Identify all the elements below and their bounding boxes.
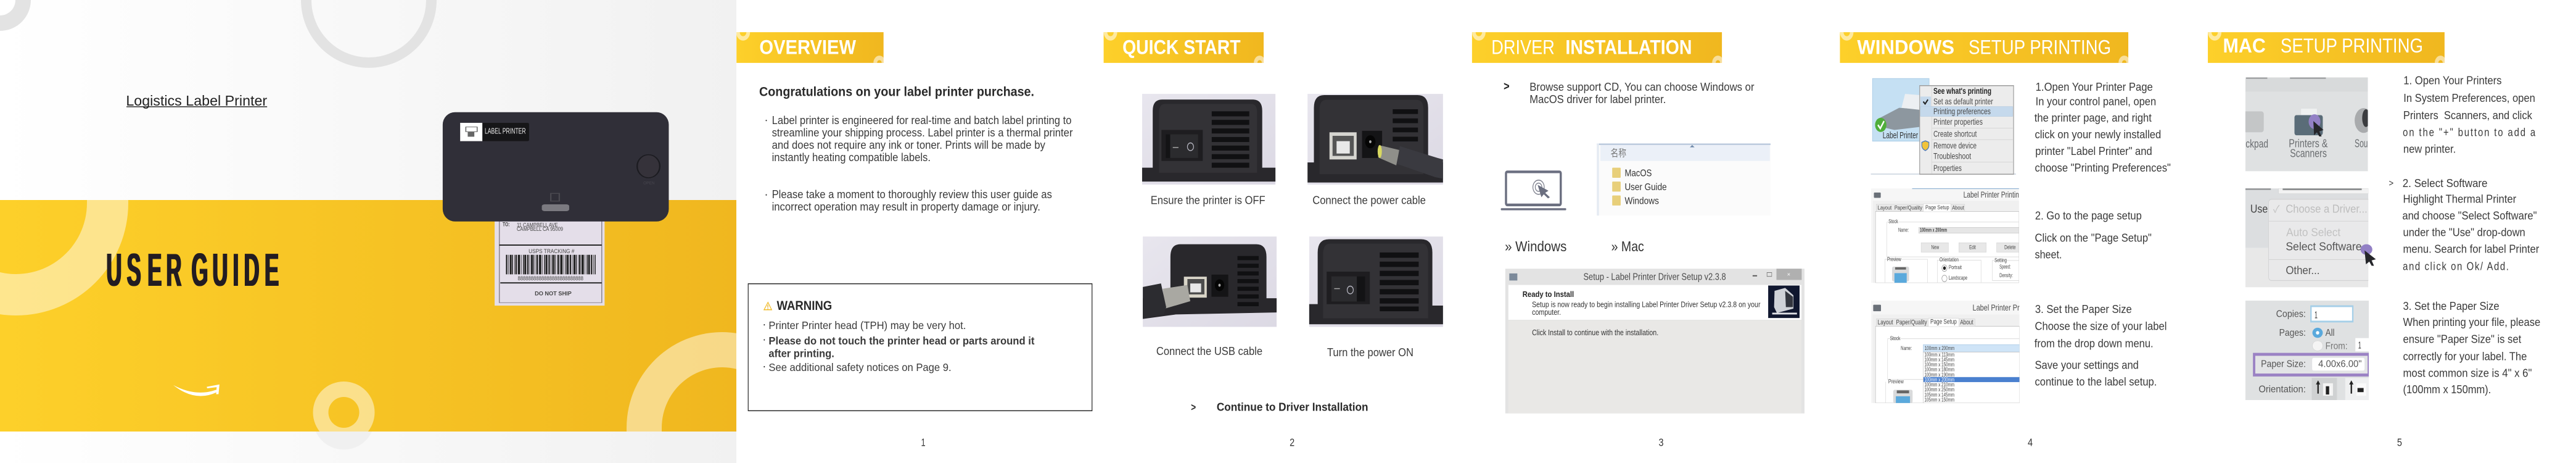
- caption: ensure off: Ensure the printer is OFF: [1151, 194, 1265, 207]
- mac setup header: SETUP PRINTING: [2281, 36, 2423, 57]
- screenshot: paper size dropdown: About: [1960, 319, 1973, 327]
- screenshot: page setup tab: [1871, 188, 2019, 286]
- screenshot: print dialog paper size: Pages:: [2279, 328, 2306, 338]
- folder icons: [1612, 168, 1621, 206]
- step 3 text: 3. Set the Paper Size: [2403, 300, 2500, 313]
- browse instruction: >: [1504, 79, 1510, 93]
- intro bullet 1: Label printer is engineered for real-time and batch label printing to: [772, 114, 1072, 127]
- screenshot: print dialog paper size: Orientation:: [2258, 384, 2306, 395]
- screenshot: paper size dropdown: 100mm x 210mm: [1924, 381, 1954, 388]
- warning box: Printer Printer head (TPH) may be very hot.: [768, 320, 966, 332]
- shipping label: CAMPBELL CA 95009: [517, 225, 563, 232]
- page number: 1: [921, 436, 926, 449]
- paper size highlight: 4.00x6.00": [2318, 359, 2362, 370]
- printer body: [443, 112, 669, 222]
- screenshot: page setup tab: Page Setup: [1925, 204, 1949, 211]
- cover page: [0, 0, 736, 463]
- folder listing: [1597, 143, 1771, 215]
- photo: usb cable: [1143, 236, 1277, 327]
- step 3 text: Choose the size of your label: [2035, 320, 2167, 333]
- step 2 text: 2. Select Software: [2403, 177, 2488, 190]
- screenshot: page setup tab: Name:: [1898, 227, 1909, 233]
- quick start header: QUICK START: [1122, 37, 1241, 59]
- screenshot: select software menu: ✓: [2273, 204, 2280, 215]
- step 3 text: from the drop down menu.: [2035, 337, 2154, 350]
- windows setup header: [1840, 32, 2129, 63]
- screenshot: print dialog paper size: Copies:: [2276, 309, 2306, 320]
- screenshot: page setup tab: Edit: [1969, 244, 1976, 251]
- step 3 text: ensure "Paper Size" is set: [2403, 333, 2522, 346]
- screenshot: print dialog paper size: 1: [2358, 340, 2361, 351]
- continue link: >: [1191, 402, 1196, 414]
- shipping label: TO:: [503, 220, 510, 228]
- user guide title: USER GUIDE: [106, 244, 279, 296]
- window controls: ×: [1787, 271, 1790, 278]
- context menu: [1920, 86, 2014, 174]
- driver installation header: [1471, 32, 1722, 63]
- screenshot: printers and scanners: [2239, 77, 2372, 171]
- context menu: Printing preferences: [1933, 107, 1991, 116]
- page number: 3: [1659, 436, 1664, 449]
- context menu: Properties: [1933, 164, 1962, 173]
- screenshot: paper size dropdown: Stock: [1890, 335, 1901, 341]
- caption: power cable: Connect the power cable: [1312, 194, 1426, 207]
- decorative grey rings: [0, 0, 437, 449]
- screenshot: select software menu: Select Software: [2286, 241, 2362, 253]
- overview header: OVERVIEW: [759, 36, 856, 59]
- screenshot: paper size dropdown: [1871, 301, 2020, 403]
- intro bullet 2: Please take a moment to thoroughly review this user guide as: [772, 188, 1052, 201]
- folder listing: Windows: [1624, 195, 1659, 206]
- step 1 text: on the "+" button to add a: [2403, 126, 2536, 139]
- screenshot: paper size dropdown: 100mm x 145mm: [1924, 356, 1954, 363]
- step 1 text: 1.Open Your Printer Page: [2036, 80, 2153, 93]
- step 2 text: and click on Ok/ Add.: [2403, 260, 2509, 273]
- step 2 text: sheet.: [2035, 248, 2062, 261]
- setup window: Click Install to continue with the installation.: [1532, 328, 1658, 337]
- shipping label: [495, 220, 604, 306]
- setup window: Setup - Label Printer Driver Setup v2.3.8: [1583, 271, 1726, 282]
- screenshot: select software menu: Auto Select: [2286, 227, 2341, 239]
- screenshot: page setup tab: Label Printer Printin: [1964, 190, 2019, 199]
- screenshot: page setup tab: 100mm x 200mm: [1920, 227, 1947, 233]
- context menu: Create shortcut: [1933, 129, 1977, 139]
- intro bullet 1: instantly heating compatible labels.: [772, 151, 931, 164]
- step 2 text: Highlight Thermal Printer: [2403, 193, 2517, 206]
- step 1 text: [2403, 74, 2536, 156]
- step 1 text: choose "Printing Preferences": [2035, 161, 2171, 174]
- folder listing: User Guide: [1624, 181, 1667, 192]
- quick start header: [1104, 32, 1264, 63]
- warning box: after printing.: [768, 348, 834, 360]
- window controls: [1509, 269, 1801, 280]
- step 3 text: correctly for your label. The: [2403, 350, 2527, 363]
- intro bullet 2: incorrect operation may result in property damage or injury.: [772, 201, 1040, 213]
- screenshot: paper size dropdown: 100mm x 250mm: [1924, 386, 1954, 393]
- page number: 4: [2028, 436, 2033, 449]
- warning box: See additional safety notices on Page 9.: [768, 362, 952, 373]
- paper size highlight: Paper Size:: [2261, 359, 2306, 370]
- step 1 text: new printer.: [2403, 143, 2456, 156]
- screenshot: paper size dropdown: 100mm x 180mm: [1924, 366, 1954, 373]
- context menu: Troubleshoot: [1933, 151, 1972, 161]
- shipping label: 8888888888888888888888888: [518, 275, 583, 282]
- screenshot: page setup tab: Layout: [1878, 204, 1892, 211]
- intro bullet 1: [765, 114, 1073, 164]
- screenshot: paper size dropdown: Page Setup: [1930, 319, 1957, 326]
- screenshot: paper size dropdown: 100mm x 200mm: [1925, 344, 1954, 351]
- step 1 text: the printer page, and right: [2035, 112, 2152, 124]
- screenshot: paper size dropdown: 100mm x 200mm: [1924, 376, 1954, 383]
- step 1 text: In System Preferences, open: [2403, 91, 2535, 104]
- intro bullet 2: [765, 188, 1052, 213]
- shipping label: DO NOT SHIP: [535, 290, 572, 297]
- step 2 text: 2. Go to the page setup: [2035, 209, 2142, 222]
- screenshot: printer context menu: [1871, 78, 2016, 175]
- cover background: [0, 0, 736, 463]
- driver installation header: DRIVER: [1491, 37, 1555, 59]
- icon: laptop with cursor: [1501, 172, 1566, 211]
- step 3 text: Save your settings and: [2035, 359, 2139, 372]
- screenshot: print dialog paper size: 1: [2315, 310, 2318, 321]
- step 2 text: under the "Use" drop-down: [2403, 226, 2525, 239]
- step 3 text: (100mm x 150mm).: [2403, 383, 2491, 396]
- page number: 5: [2397, 436, 2402, 449]
- screenshot: page setup tab: About: [1952, 204, 1964, 211]
- screenshot: select software menu: Choose a Driver...: [2286, 203, 2368, 215]
- screenshot: paper size dropdown: Label Printer Pr: [1972, 303, 2020, 313]
- screenshot: printer context menu: Label Printer: [1883, 130, 1919, 140]
- screenshot: select software menu: Use: [2250, 203, 2268, 215]
- icon: cursor: [2361, 244, 2376, 265]
- screenshot: print dialog paper size: From:: [2326, 341, 2348, 352]
- decorative pale rings on yellow: [0, 200, 736, 443]
- screenshot: print dialog paper size: All: [2326, 328, 2335, 338]
- photo: power cable: [1307, 94, 1443, 185]
- screenshot: paper size dropdown: 100mm x 113mm: [1924, 351, 1954, 358]
- step 1 text: 1. Open Your Printers: [2403, 74, 2501, 87]
- mac setup header: [2208, 32, 2445, 63]
- mac setup header: MAC: [2223, 36, 2266, 57]
- page 4: windows setup printing: [1840, 26, 2171, 449]
- screenshot: printers and scanners: Sou: [2355, 138, 2368, 150]
- screenshot: page setup tab: Paper/Quality: [1895, 204, 1923, 211]
- step 3 text: continue to the label setup.: [2035, 375, 2157, 388]
- screenshot: paper size dropdown: 105mm x 150mm: [1924, 396, 1954, 403]
- step 2 text: menu. Search for label Printer: [2403, 243, 2540, 256]
- context menu: See what's printing: [1933, 86, 1991, 96]
- screenshot: page setup tab: Delete: [2004, 244, 2016, 251]
- setup window: Setup is now ready to begin installing Label Printer Driver Setup v2.3.8 on your: [1532, 300, 1761, 309]
- step 3 text: When printing your file, please: [2403, 316, 2540, 328]
- context menu: Set as default printer: [1933, 97, 1993, 106]
- setup icon: [1768, 286, 1800, 318]
- icon: printer with cursor: [2294, 109, 2324, 136]
- driver installation header: INSTALLATION: [1565, 37, 1692, 59]
- step 3 text: 3. Set the Paper Size: [2035, 302, 2132, 315]
- context menu: Remove device: [1933, 141, 1977, 151]
- photo: power switch on: [1309, 236, 1443, 327]
- browse instruction: MacOS driver for label printer.: [1529, 93, 1666, 106]
- folder listing: MacOS: [1624, 167, 1652, 178]
- screenshot: page setup tab: Orientation: [1940, 256, 1959, 263]
- step 1 text: click on your newly installed: [2035, 128, 2161, 141]
- context menu: Printer properties: [1933, 117, 1983, 127]
- paper size highlight: [2254, 354, 2369, 375]
- step 2 text: Click on the "Page Setup": [2035, 231, 2152, 244]
- yellow band: [0, 200, 736, 432]
- windows setup header: SETUP PRINTING: [1969, 37, 2111, 59]
- paper release latch: [542, 193, 569, 211]
- page 5: mac setup printing: [2208, 26, 2540, 449]
- caption: usb cable: Connect the USB cable: [1156, 344, 1262, 357]
- windows setup header: WINDOWS: [1857, 37, 1954, 59]
- screenshot: printers and scanners: ckpad: [2245, 138, 2268, 151]
- screenshot: paper size dropdown: 105mm x 145mm: [1924, 391, 1954, 398]
- step 3 text: [2035, 302, 2167, 388]
- setup window: [1505, 269, 1804, 414]
- intro heading: Congratulations on your label printer purchase.: [759, 85, 1034, 99]
- screenshot: page setup tab: Portrait: [1949, 264, 1962, 270]
- printer body: LABEL PRINTER: [485, 127, 526, 136]
- step 2 text: and choose "Select Software": [2402, 209, 2537, 222]
- browse instruction: Browse support CD, You can choose Windows or: [1529, 80, 1755, 93]
- product subtitle: Logistics Label Printer: [126, 93, 267, 109]
- orientation icons: [2311, 378, 2369, 400]
- caption: power on: Turn the power ON: [1327, 346, 1414, 359]
- step 1 text: printer "Label Printer" and: [2035, 145, 2152, 158]
- warning box: [748, 284, 1092, 411]
- setup window: Ready to Install: [1523, 290, 1574, 299]
- screenshot: select software menu: Other...: [2286, 264, 2319, 277]
- overview header: [736, 32, 884, 63]
- continue link: Continue to Driver Installation: [1217, 401, 1368, 414]
- page 1: overview: [736, 26, 1092, 449]
- photo: power switch off: [1142, 94, 1275, 185]
- step 3 text: most common size is 4" x 6": [2403, 367, 2532, 380]
- icon: amazon smile: [173, 385, 220, 396]
- browse instruction: [1504, 79, 1755, 106]
- page 3: driver installation: [1472, 26, 1804, 449]
- screenshot: page setup tab: Preview: [1887, 256, 1901, 262]
- page number: 2: [1290, 436, 1294, 449]
- screenshot: paper size dropdown: Preview: [1888, 378, 1904, 385]
- power button: [637, 155, 660, 185]
- page 2: quick start: [1104, 26, 1443, 449]
- screenshot: paper size dropdown: Paper/Quality: [1896, 319, 1927, 327]
- printer badge: [460, 123, 529, 141]
- screenshot: page setup tab: Setting: [1994, 256, 2007, 263]
- step 2 text: >: [2389, 178, 2393, 188]
- intro bullet 1: streamline your shipping process. Label printer is a thermal printer: [772, 127, 1073, 139]
- screenshot: paper size dropdown: Layout: [1878, 319, 1893, 327]
- screenshot: printers and scanners: Scanners: [2290, 148, 2327, 160]
- icon: warning triangle: [764, 302, 772, 310]
- warning box: Please do not touch the printer head or parts around it: [768, 336, 1035, 348]
- screenshot: print dialog paper size: [2245, 301, 2369, 400]
- screenshot: page setup tab: Stock: [1888, 218, 1898, 225]
- screenshot: paper size dropdown: 100mm x 150mm: [1924, 361, 1954, 368]
- screenshot: page setup tab: Density:: [1999, 272, 2013, 278]
- power button: OPEN: [643, 180, 654, 185]
- mac label: » Mac: [1611, 239, 1644, 255]
- windows label: » Windows: [1505, 239, 1566, 255]
- screenshot: select software menu: [2245, 188, 2376, 287]
- step 2 text: [2389, 177, 2540, 273]
- shipping label: 11 CAMPBELL AVE: [517, 221, 558, 228]
- step 1 text: [2035, 80, 2171, 174]
- screenshot: page setup tab: Speed:: [1999, 263, 2010, 270]
- setup window: computer.: [1532, 308, 1561, 317]
- shipping label: USPS TRACKING #: [529, 248, 575, 254]
- folder listing: 名称: [1611, 148, 1626, 159]
- step 2 text: [2035, 209, 2152, 261]
- screenshot: printers and scanners: Printers &: [2289, 138, 2327, 150]
- step 1 text: In your control panel, open: [2036, 95, 2156, 108]
- intro bullet 1: and does not require any ink or toner. Prints will be made by: [772, 139, 1045, 151]
- screenshot: paper size dropdown: 100mm x 190mm: [1924, 371, 1954, 378]
- step 3 text: [2403, 300, 2540, 396]
- screenshot: paper size dropdown: Name:: [1901, 344, 1912, 351]
- step 1 text: Printers Scanners, and click: [2403, 109, 2532, 122]
- screenshot: page setup tab: Landscape: [1949, 274, 1967, 281]
- warning box: WARNING: [776, 299, 832, 314]
- screenshot: page setup tab: New: [1932, 244, 1940, 251]
